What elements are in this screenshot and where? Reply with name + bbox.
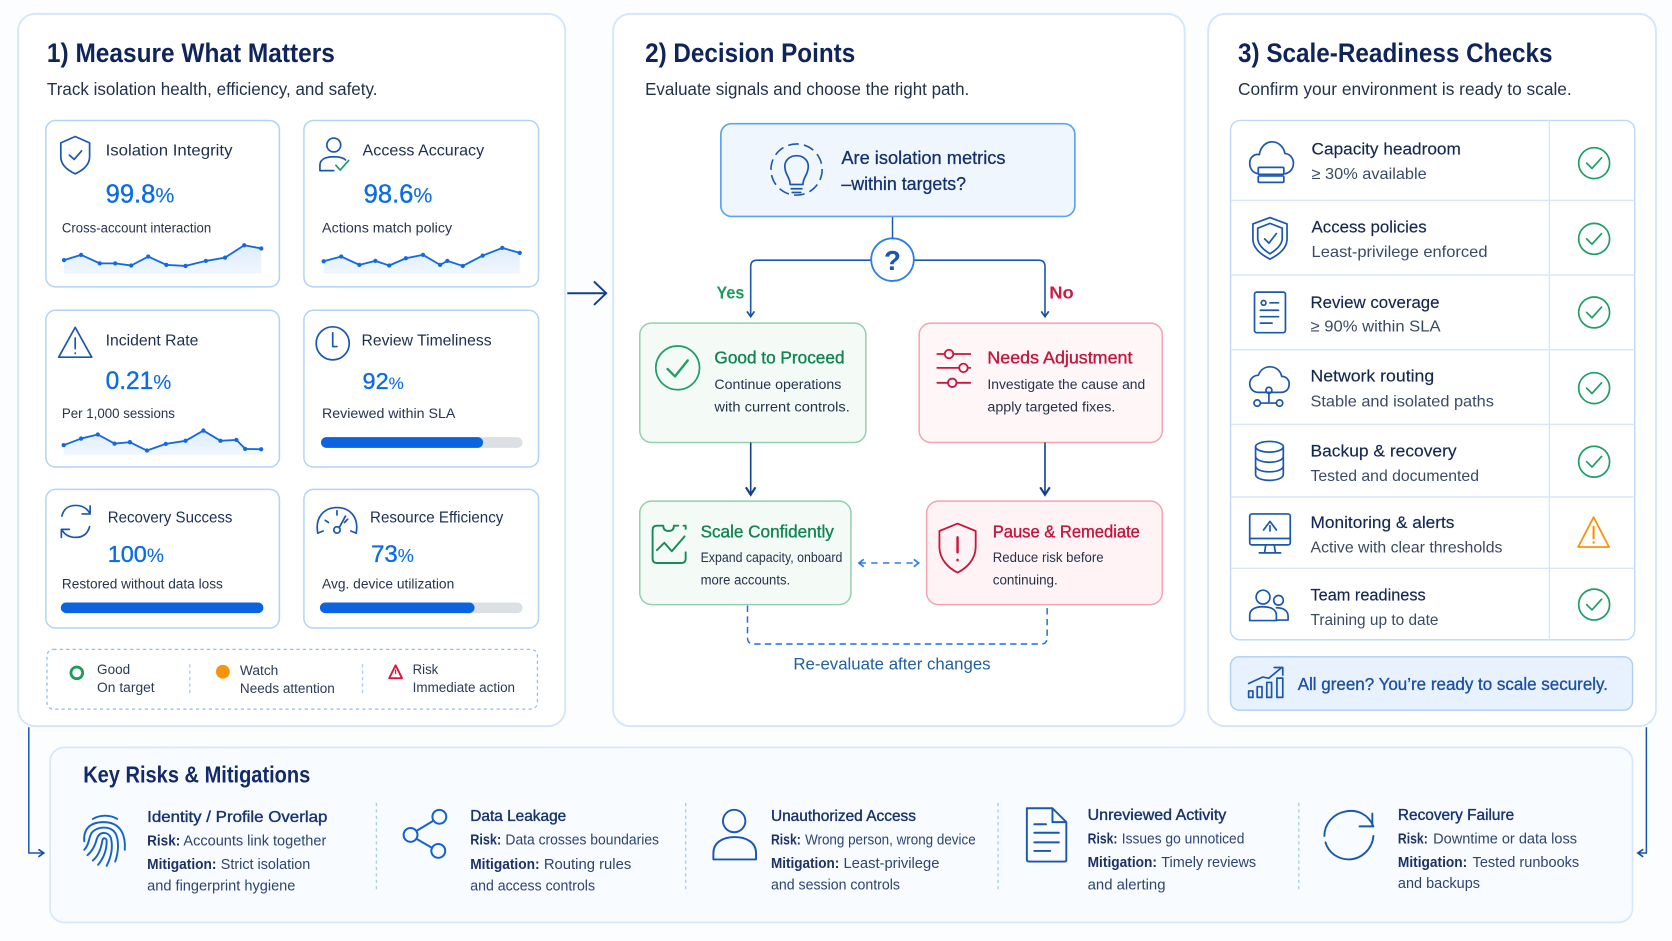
subtitle: decision: Evaluate signals and choose the right path. [645,79,969,99]
risk: unauthorized access [713,808,976,893]
card title: Resource Efficiency [370,509,503,526]
row: monitoring and alerts: Monitoring & alerts [1310,513,1454,532]
row: team readiness: Team readiness [1310,585,1426,604]
icon: shield [1253,218,1287,259]
metric card: resource efficiency [304,489,539,628]
sparkline [322,246,522,274]
card title: Review Timeliness [362,332,492,349]
icon: shield check [61,136,90,174]
risk: identity overlap [84,809,327,894]
risk text: and backups [1398,876,1480,892]
risk text [147,834,327,894]
icon: refresh [61,505,90,537]
sparkline [62,243,263,274]
body: Reduce risk before [993,549,1104,565]
legend item: good [71,661,155,695]
card: scale confidently [640,501,851,605]
arrow: adjust to pause [1044,443,1046,495]
panel: decision points [613,14,1185,726]
status: pass [1579,446,1610,477]
row: team readiness: Training up to date [1310,612,1439,629]
risk text: and alerting [1088,877,1165,893]
subtitle: scale readiness: Confirm your environment is ready to scale. [1238,79,1572,99]
risk text [771,833,976,893]
icon: light bulb [771,144,822,195]
value: 98.6% [364,181,432,209]
row: network routing: Network routing [1310,367,1434,386]
value: 73% [371,541,414,568]
icon: fingerprint [84,816,125,866]
body [713,376,850,415]
legend item: good: On target [97,679,155,695]
body [993,549,1104,587]
row: capacity headroom: ≥ 30% available [1312,166,1427,183]
card title: Isolation Integrity [106,143,232,160]
row: team readiness [1250,585,1610,629]
description: Avg. device utilization [322,576,454,592]
risk text: Timely reviews [1161,855,1256,871]
risk text: Data crosses boundaries [505,833,659,849]
value: 92% [363,368,404,394]
icon: clock [316,327,349,360]
icon: growth chart [1249,667,1283,697]
label: no: No [1049,283,1074,303]
status: pass [1579,373,1610,404]
body: apply targeted fixes. [987,399,1115,415]
icon: alert shield [939,524,976,573]
risk text: Downtime or data loss [1433,831,1577,847]
legend item: good: Good [97,661,130,677]
legend item: risk: Risk [413,661,438,677]
question text [841,148,1006,194]
metric card: access accuracy [304,120,539,287]
row: access policies: Access policies [1312,217,1427,236]
risk text: Issues go unnoticed [1122,831,1244,847]
risk text: Mitigation: [1398,855,1467,871]
legend item: watch [216,662,335,696]
progress bar [321,437,523,448]
progress bar [320,602,523,613]
risk text: Risk: [147,834,180,850]
icon: gauge [317,508,357,533]
progress bar [61,602,263,613]
metric card: review timeliness [304,310,539,467]
row: capacity headroom [1250,140,1610,183]
value: 100% [108,541,164,567]
risk text: Mitigation: [147,857,216,873]
icon: database [1256,441,1283,480]
title: Needs Adjustment [987,348,1133,368]
risk text: Risk: [771,833,801,849]
risk title: Unauthorized Access [771,808,916,825]
risk text: Strict isolation [221,857,310,873]
metric card: incident rate [46,310,279,467]
banner text: All green? You’re ready to scale securely. [1298,674,1608,694]
description: Cross-account interaction [62,219,211,235]
row: backup and recovery: Backup & recovery [1310,441,1457,460]
description: Actions match policy [322,219,452,235]
risk: unreviewed activity [1027,807,1256,893]
body: Expand capacity, onboard [701,549,842,565]
risk text: and fingerprint hygiene [147,878,295,894]
title: Good to Proceed [714,348,845,368]
risk text: and access controls [470,878,595,894]
status: pass [1579,148,1610,179]
risk title: Identity / Profile Overlap [147,809,327,826]
label: re-evaluate: Re-evaluate after changes [793,655,991,674]
heading: scale readiness: 3) Scale-Readiness Checks [1238,38,1553,68]
status: pass [1579,589,1610,620]
body: continuing. [993,571,1058,587]
risk text [1088,831,1256,893]
risk: recovery failure [1324,807,1579,892]
icon: share nodes [404,810,446,858]
heading: decision points: 2) Decision Points [645,38,855,68]
row: network routing: Stable and isolated paths [1310,393,1494,410]
icon: document list [1255,292,1285,333]
icon: document [1027,808,1066,862]
question text: –within targets? [841,174,966,194]
icon: chart clipboard [653,526,686,563]
icon: person [713,810,756,859]
risk text: and session controls [771,877,900,893]
icon: cloud server [1250,142,1293,182]
row: review coverage: ≥ 90% within SLA [1310,319,1441,336]
arrow: dashed two-way [859,562,918,564]
card title: Recovery Success [108,509,232,526]
legend item: risk: Immediate action [413,679,515,695]
icon: warning triangle [59,327,92,357]
value: 0.21% [106,368,171,395]
card: pause and remediate [927,501,1162,605]
risk text: Accounts link together [183,834,327,850]
card title: Access Accuracy [363,143,484,160]
icon: recovery loop [1324,811,1373,859]
icon: user check [320,138,349,171]
checklist table [1231,120,1635,640]
risk text [1398,831,1579,892]
connector: right panel to risks [1638,727,1646,853]
risk text: Routing rules [544,857,631,873]
icon: team [1250,590,1288,621]
connector: left panel to risks [29,727,44,853]
icon: monitor [1250,514,1290,553]
subtitle: measure: Track isolation health, efficiency, and safety. [47,79,377,99]
risk text [470,833,659,894]
body: Continue operations [714,376,841,392]
risk text: Least-privilege [843,856,939,872]
card: good to proceed [640,323,866,443]
risk text: Mitigation: [771,856,839,872]
arrow: metrics to decisions [567,282,606,305]
risk text: Risk: [470,833,501,849]
body [701,549,842,587]
risk text: Risk: [1088,831,1118,847]
row: access policies: Least-privilege enforced [1312,244,1488,261]
body [987,376,1145,415]
sparkline [62,428,263,455]
risk: data leakage [404,808,659,894]
body: Investigate the cause and [987,376,1145,392]
status: warning [1578,517,1609,547]
risk title: Recovery Failure [1398,807,1514,824]
row: access policies [1253,217,1610,261]
row: review coverage: Review coverage [1310,293,1440,312]
title: Pause & Remediate [993,521,1140,541]
body: with current controls. [713,399,850,415]
icon: sliders [937,350,970,387]
risk text: Tested runbooks [1473,855,1579,871]
icon: cloud network [1250,367,1289,406]
connectors: question to branches [751,216,1045,317]
legend item: watch: Watch [240,662,278,678]
loop: re-evaluate [747,606,1047,644]
row: backup and recovery [1256,441,1610,485]
heading: key risks: Key Risks & Mitigations [83,762,310,788]
metric card: recovery success [46,489,279,628]
row: network routing [1250,367,1610,410]
decision box [721,124,1075,216]
legend item: risk [389,661,515,695]
risk title: Unreviewed Activity [1088,807,1227,824]
legend [47,649,537,709]
status: pass [1579,297,1610,328]
card: needs adjustment [919,323,1162,443]
risk text: Mitigation: [470,857,540,873]
row: capacity headroom: Capacity headroom [1312,140,1461,159]
body: more accounts. [701,571,790,587]
decision node: question mark: ? [884,245,901,276]
row: monitoring and alerts [1250,513,1609,556]
risk text: Mitigation: [1088,855,1157,871]
value: 99.8% [106,181,174,209]
panel: measure what matters [18,14,565,726]
risk text: Risk: [1398,831,1428,847]
row: review coverage [1255,292,1610,336]
legend item: watch: Needs attention [240,680,335,696]
arrow: proceed to scale [750,443,752,495]
panel: key risks and mitigations [50,747,1633,922]
risk title: Data Leakage [470,808,566,825]
panel: scale readiness [1208,14,1656,726]
risk text: Wrong person, wrong device [805,833,976,849]
banner: all green [1231,657,1633,710]
question text: Are isolation metrics [841,148,1006,168]
decision node: question mark [871,238,914,281]
status: pass [1579,223,1610,254]
icon: check circle [656,346,700,390]
row: monitoring and alerts: Active with clear thresholds [1310,539,1502,556]
description: Per 1,000 sessions [62,405,175,421]
card title: Incident Rate [106,332,198,349]
row: backup and recovery: Tested and documented [1310,468,1479,485]
description: Restored without data loss [62,576,223,592]
title: Scale Confidently [701,521,834,541]
description: Reviewed within SLA [322,405,456,421]
label: yes: Yes [717,283,744,303]
metric card: isolation integrity [46,120,279,287]
heading: measure what matters: 1) Measure What Matters [47,38,335,68]
